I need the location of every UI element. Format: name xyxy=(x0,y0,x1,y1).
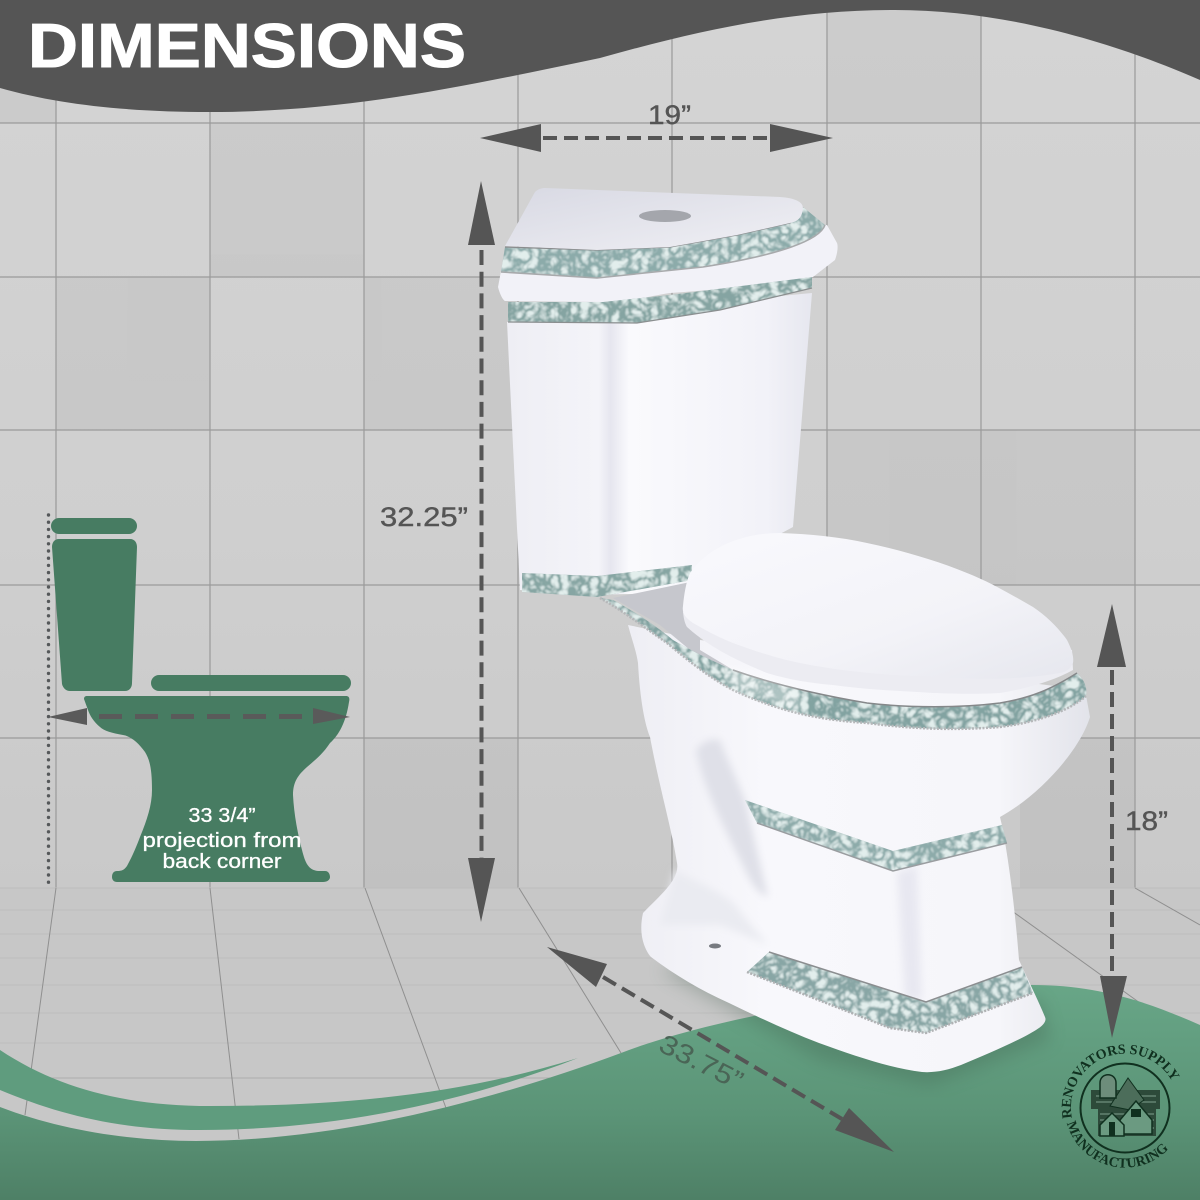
title: DIMENSIONS xyxy=(28,12,466,81)
label: 32.25 inch: 32.25” xyxy=(380,502,468,532)
seat lower ring xyxy=(683,590,1073,694)
icon bowl xyxy=(84,696,349,882)
base band xyxy=(747,952,1033,1033)
brand logo: MANUFACTURING xyxy=(1066,1120,1168,1168)
pedestal band xyxy=(745,800,1007,871)
brand logo: RENOVATORS SUPPLY xyxy=(1062,1044,1180,1119)
dimension arrow: 19 inch width xyxy=(480,124,833,152)
bowl band xyxy=(600,598,1086,729)
label: 18 inch: 18” xyxy=(1125,806,1168,836)
background: tiled floor xyxy=(0,888,1200,1200)
toilet photo xyxy=(498,188,1090,1085)
projection caption xyxy=(142,805,302,873)
pedestal corner highlight xyxy=(897,866,922,1000)
trap channel shading xyxy=(696,739,768,897)
label: 19 inch: 19” xyxy=(648,100,691,130)
icon seat xyxy=(151,675,351,691)
dotted wall line xyxy=(47,515,50,885)
projection arrow xyxy=(48,708,350,725)
deck xyxy=(613,580,750,680)
background: tiled wall xyxy=(0,0,1200,890)
tank lid band xyxy=(501,207,825,278)
tank body xyxy=(507,293,812,595)
dimension arrow: 32.25 inch height xyxy=(468,181,495,922)
tank lid top xyxy=(505,188,803,250)
tank bottom band xyxy=(522,565,692,597)
bowl base and pedestal xyxy=(628,625,1090,1072)
icon lid xyxy=(51,518,137,534)
faded band highlight xyxy=(720,662,800,712)
green floor wave xyxy=(0,985,1200,1200)
dimension arrow: 18 inch height xyxy=(1097,604,1127,1038)
seat lid xyxy=(683,533,1073,679)
projection caption: projection from xyxy=(142,830,302,852)
tank rim xyxy=(498,225,838,302)
green swoosh xyxy=(0,1050,578,1130)
label: 33.75 inch: 33.75” xyxy=(654,1029,748,1096)
tank upper band xyxy=(508,277,812,323)
projection caption: 33 3/4” xyxy=(188,805,256,827)
projection caption: back corner xyxy=(162,851,282,873)
flush button xyxy=(639,210,691,222)
side view toilet icon xyxy=(51,518,351,882)
icon tank xyxy=(52,539,137,691)
brand logo xyxy=(1062,1044,1180,1168)
header banner xyxy=(0,0,1200,112)
logo house xyxy=(1091,1075,1160,1136)
dimension arrow: 33.75 inch depth xyxy=(547,947,894,1152)
floor shadow xyxy=(660,960,1050,1085)
drain hole xyxy=(709,944,721,948)
